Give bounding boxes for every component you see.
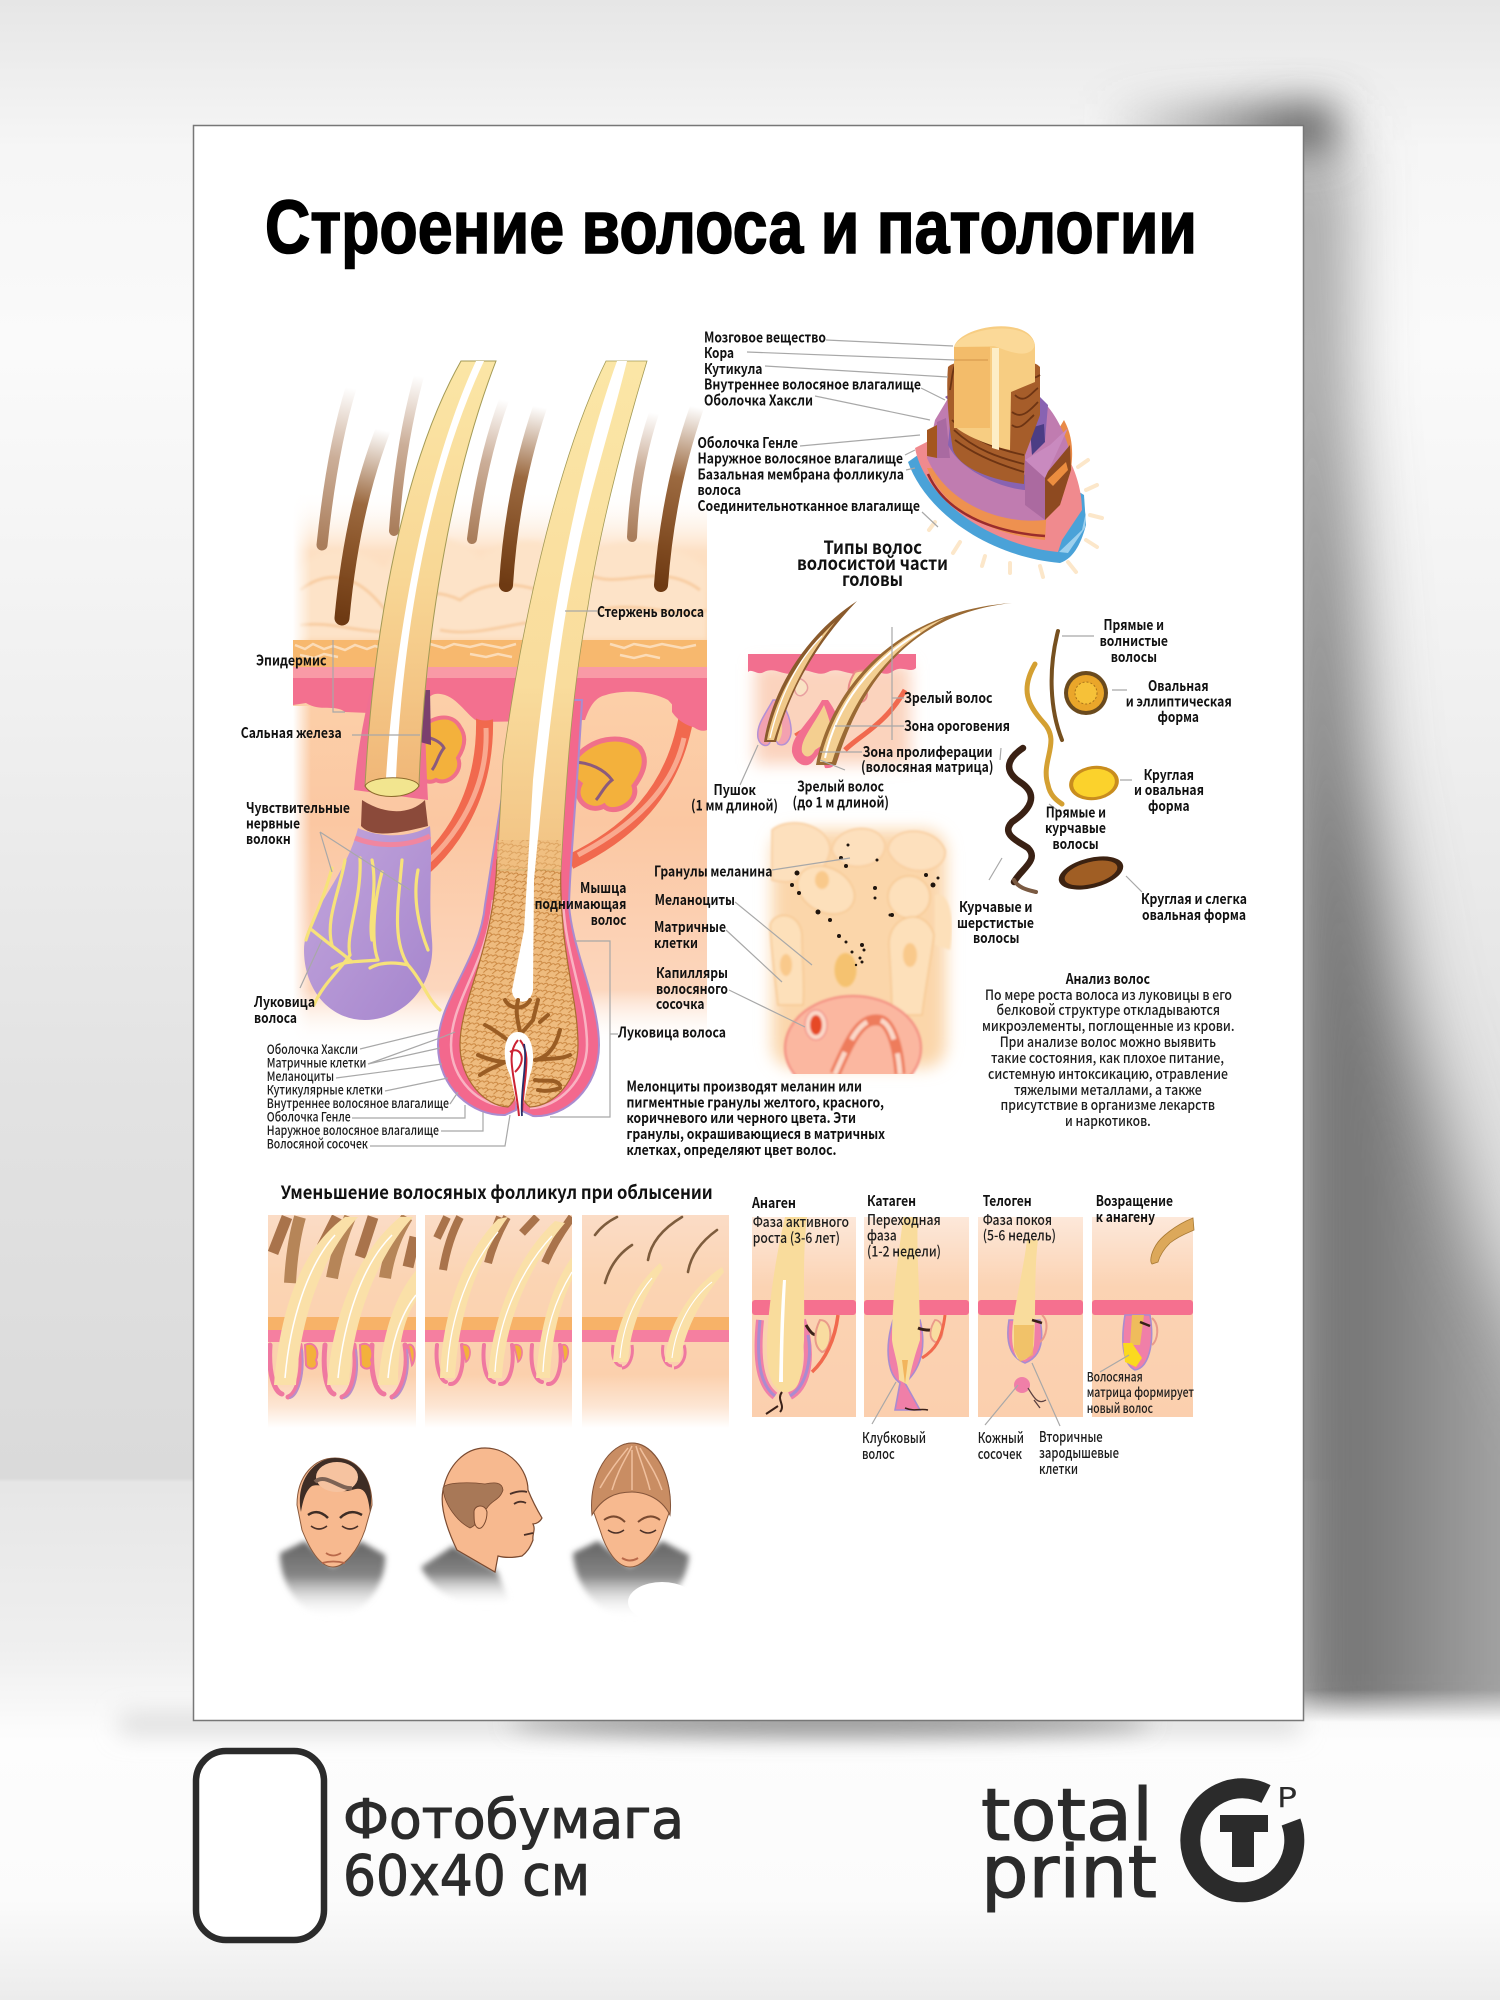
radiating fibres bbox=[929, 460, 1102, 577]
labels for the main illustration bbox=[241, 601, 726, 1153]
labels for the cross-section: Кора bbox=[704, 342, 734, 363]
labels for growth cycle stages: клетки bbox=[1039, 1458, 1078, 1479]
labels for hair shapes: волосы bbox=[1052, 833, 1099, 854]
labels for hair shapes: шерстистые bbox=[957, 912, 1034, 933]
labels for growth cycle stages: Анаген bbox=[751, 1192, 796, 1213]
labels for growth cycle stages: (5-6 недель) bbox=[983, 1225, 1056, 1246]
text block: melanocytes: пигментные гранулы желтого, красного, bbox=[626, 1092, 884, 1113]
paper format label bbox=[343, 1788, 684, 1909]
poster sheet bbox=[194, 126, 1304, 1720]
melanocytes bbox=[478, 1000, 570, 1091]
labels for hair shapes: и овальная bbox=[1134, 779, 1204, 800]
skin block bbox=[293, 513, 707, 1026]
wavy golden hair bbox=[1027, 664, 1062, 804]
leader lines for growth cycle bbox=[872, 1355, 1129, 1426]
labels for hair shapes: Овальная bbox=[1148, 675, 1209, 696]
leader lines for the scalp diagram bbox=[740, 627, 904, 785]
labels for the main illustration: Чувствительные bbox=[246, 797, 350, 818]
labels for the main illustration: Внутреннее волосяное влагалище bbox=[267, 1093, 449, 1112]
labels for hair shapes: Круглая bbox=[1144, 764, 1194, 785]
labels for the cross-section: Кутикула bbox=[704, 358, 762, 379]
text block: melanocytes bbox=[626, 1076, 885, 1160]
labels for the main illustration: Эпидермис bbox=[256, 650, 327, 670]
labels for the cross-section: Базальная мембрана фолликула bbox=[698, 464, 904, 484]
labels for the main illustration: Кутикулярные клетки bbox=[267, 1080, 383, 1099]
scalp diagram: vellus and mature hair bbox=[748, 601, 1012, 768]
skin bands bbox=[293, 640, 707, 667]
labels for the main illustration: Стержень волоса bbox=[597, 601, 704, 622]
labels for melanin close-up: волосяного bbox=[656, 978, 728, 999]
labels for growth cycle stages: Фаза активного bbox=[753, 1211, 849, 1232]
purple bulb with nerves bbox=[304, 800, 440, 1020]
labels for growth cycle stages: матрица формирует bbox=[1087, 1382, 1194, 1401]
growth cycle stage: catagen bbox=[864, 1217, 969, 1417]
labels for the scalp diagram: (1 мм длиной) bbox=[691, 794, 778, 816]
oval section 2 bbox=[1067, 763, 1121, 803]
labels for the scalp diagram: Пушок bbox=[714, 779, 756, 800]
icon: paper format frame bbox=[196, 1751, 324, 1940]
brand wordmark: total bbox=[981, 1773, 1153, 1857]
labels for the main illustration: поднимающая bbox=[535, 893, 626, 914]
portrait: balding man in profile bbox=[421, 1448, 542, 1606]
sebaceous gland right bbox=[571, 739, 644, 810]
text block: hair analysis: системную интоксикацию, отравление bbox=[988, 1064, 1228, 1084]
labels for hair shapes: курчавые bbox=[1045, 817, 1106, 838]
hair shape examples with cross-section ovals bbox=[1008, 631, 1127, 896]
labels for growth cycle stages: Вторичные bbox=[1039, 1426, 1103, 1447]
leader lines for the main illustration bbox=[300, 611, 618, 1146]
portrait: man with crown thinning bbox=[280, 1458, 385, 1618]
portrait: woman with thinning parting bbox=[573, 1443, 696, 1622]
labels for hair shapes: Прямые и bbox=[1046, 802, 1106, 822]
labels for growth cycle stages: зародышевые bbox=[1039, 1442, 1119, 1463]
labels for the main illustration: Наружное волосяное влагалище bbox=[267, 1120, 439, 1139]
labels for hair shapes: волосы bbox=[1111, 646, 1157, 667]
panel: dense follicles bbox=[268, 1215, 425, 1428]
labels for the cross-section bbox=[698, 326, 921, 516]
text block: hair analysis: По мере роста волоса из луковицы в его bbox=[985, 985, 1232, 1005]
text block: melanocytes: Мелонциты производят меланин или bbox=[626, 1076, 862, 1097]
labels for the main illustration: Сальная железа bbox=[241, 722, 342, 743]
melanin close-up illustration bbox=[770, 823, 952, 1100]
paper format label: 60x40 см bbox=[343, 1844, 590, 1909]
heading: hair types: головы bbox=[842, 566, 903, 592]
paper format label: Фотобумага bbox=[343, 1788, 684, 1851]
labels for hair shapes: волнистые bbox=[1100, 630, 1168, 651]
labels for hair shapes: форма bbox=[1158, 706, 1199, 727]
sebaceous gland left bbox=[413, 717, 464, 782]
text block: melanocytes: коричневого или черного цвета. Эти bbox=[626, 1107, 856, 1128]
labels for the main illustration: Луковица bbox=[253, 991, 315, 1012]
labels for the scalp diagram: Зрелый волос bbox=[797, 775, 884, 796]
thin hairs bbox=[322, 376, 697, 618]
labels for the scalp diagram: Зона пролиферации bbox=[862, 741, 992, 762]
text block: hair analysis: белковой структуре откладываются bbox=[996, 1000, 1220, 1020]
text block: hair analysis: При анализе волос можно выявить bbox=[1000, 1032, 1216, 1052]
labels for hair shapes: Курчавые и bbox=[959, 896, 1032, 917]
labels for growth cycle stages bbox=[751, 1190, 1194, 1479]
labels for melanin close-up: сосочка bbox=[656, 993, 704, 1014]
labels for growth cycle stages: (1-2 недели) bbox=[867, 1241, 941, 1262]
labels for hair shapes: Круглая и слегка bbox=[1141, 888, 1247, 909]
hair cross-section illustration bbox=[908, 326, 1102, 577]
labels for the main illustration: Матричные клетки bbox=[267, 1053, 366, 1072]
labels for hair shapes: и эллиптическая bbox=[1126, 690, 1232, 712]
leader lines for hair shapes bbox=[989, 636, 1142, 892]
growth cycle stage: anagen bbox=[752, 1217, 856, 1417]
labels for the main illustration: волокн bbox=[246, 828, 291, 849]
labels for the cross-section: Соединительнотканное влагалище bbox=[698, 495, 920, 516]
brand logo mark: P bbox=[1277, 1781, 1297, 1814]
text block: melanocytes: гранулы, окрашивающиеся в матричных bbox=[626, 1123, 885, 1144]
labels for the main illustration: нервные bbox=[246, 812, 300, 834]
labels for the cross-section: волоса bbox=[698, 479, 741, 500]
labels for the main illustration: Меланоциты bbox=[267, 1066, 334, 1085]
panel: thinning follicles bbox=[425, 1215, 580, 1428]
text block: hair analysis: присутствие в организме лекарств bbox=[1000, 1095, 1215, 1115]
labels for melanin close-up: Меланоциты bbox=[655, 889, 735, 910]
labels for growth cycle stages: Переходная bbox=[867, 1209, 941, 1230]
labels for the scalp diagram: Зрелый волос bbox=[904, 687, 993, 708]
labels for hair shapes: Прямые и bbox=[1104, 614, 1164, 635]
text block: hair analysis: такие состояния, как плохое питание, bbox=[991, 1048, 1224, 1068]
labels for melanin close-up: Капилляры bbox=[656, 962, 728, 983]
labels for the main illustration: Оболочка Хаксли bbox=[267, 1039, 358, 1058]
labels for the main illustration: волоса bbox=[254, 1007, 297, 1028]
text block: hair analysis bbox=[982, 968, 1234, 1131]
oval section 3 bbox=[1055, 850, 1127, 896]
labels for growth cycle stages: волос bbox=[862, 1443, 895, 1464]
labels for the main illustration: Луковица волоса bbox=[617, 1022, 726, 1043]
labels for the main illustration: Оболочка Генле bbox=[267, 1107, 351, 1126]
labels for growth cycle stages: новый волос bbox=[1087, 1398, 1153, 1417]
text block: hair analysis: Анализ волос bbox=[1065, 968, 1150, 989]
labels for the cross-section: Оболочка Хаксли bbox=[704, 390, 813, 411]
text block: hair analysis: и наркотиков. bbox=[1065, 1111, 1151, 1131]
heading: hair types bbox=[797, 534, 948, 592]
heading: hair types: волосистой части bbox=[797, 550, 948, 576]
long hair shaft and follicle bbox=[438, 361, 647, 1118]
labels for the scalp diagram: (волосяная матрица) bbox=[861, 756, 994, 777]
labels for the scalp diagram bbox=[691, 687, 1010, 816]
brand wordmark bbox=[981, 1773, 1157, 1914]
panel: miniaturised follicles bbox=[582, 1215, 729, 1428]
labels for melanin close-up: Матричные bbox=[654, 916, 726, 937]
text block: hair analysis: микроэлементы, поглощенные из крови. bbox=[982, 1016, 1234, 1036]
labels for growth cycle stages: Катаген bbox=[867, 1190, 916, 1211]
labels for growth cycle stages: Волосяная bbox=[1087, 1367, 1143, 1386]
straight hair bbox=[1052, 631, 1062, 740]
labels for the scalp diagram: Зона ороговения bbox=[904, 715, 1010, 736]
labels for the cross-section: Оболочка Генле bbox=[698, 432, 798, 453]
labels for the main illustration: Волосяной сосочек bbox=[267, 1134, 368, 1153]
labels for growth cycle stages: Фаза покоя bbox=[983, 1209, 1052, 1230]
labels for growth cycle stages: к анагену bbox=[1096, 1206, 1156, 1227]
text block: hair analysis: тяжелыми металлами, а также bbox=[1014, 1080, 1202, 1100]
labels for the main illustration: волос bbox=[591, 909, 627, 930]
labels for the main illustration: Мышца bbox=[580, 877, 626, 898]
heading: hair types: Типы волос bbox=[824, 534, 922, 560]
labels for growth cycle stages: Возращение bbox=[1096, 1190, 1173, 1211]
labels for the scalp diagram: (до 1 м длиной) bbox=[792, 792, 889, 812]
oval section 1 bbox=[1064, 671, 1108, 715]
labels for hair shapes: овальная форма bbox=[1142, 904, 1246, 925]
growth cycle stage: telogen bbox=[978, 1217, 1083, 1417]
labels for melanin close-up bbox=[654, 861, 772, 1014]
brand logo mark bbox=[1190, 1781, 1297, 1892]
labels for the cross-section: Наружное волосяное влагалище bbox=[698, 448, 903, 468]
labels for growth cycle stages: сосочек bbox=[978, 1443, 1022, 1464]
curly dark hair bbox=[1008, 748, 1032, 882]
labels for melanin close-up: Гранулы меланина bbox=[654, 861, 772, 882]
labels for melanin close-up: клетки bbox=[654, 932, 698, 953]
labels for the cross-section: Мозговое вещество bbox=[704, 326, 826, 348]
dermal papilla bbox=[505, 1032, 533, 1118]
labels for growth cycle stages: фаза bbox=[867, 1225, 897, 1246]
brand wordmark: print bbox=[981, 1830, 1157, 1914]
labels for growth cycle stages: Кожный bbox=[978, 1427, 1024, 1448]
labels for growth cycle stages: Телоген bbox=[983, 1190, 1032, 1211]
main illustration: hair follicle in skin bbox=[293, 361, 707, 1118]
title: Строение волоса и патологии bbox=[265, 185, 1197, 269]
growth cycle stage: return to anagen bbox=[1092, 1217, 1194, 1417]
labels for growth cycle stages: Клубковый bbox=[862, 1427, 926, 1448]
labels for growth cycle stages: роста (3-6 лет) bbox=[753, 1227, 840, 1248]
labels for hair shapes bbox=[957, 614, 1247, 948]
heading: follicle reduction in baldness: Уменьшение волосяных фолликул при облысении bbox=[281, 1179, 713, 1205]
leader lines for the cross-section bbox=[747, 340, 955, 527]
labels for the cross-section: Внутреннее волосяное влагалище bbox=[704, 374, 921, 395]
labels for hair shapes: форма bbox=[1148, 795, 1190, 816]
text block: melanocytes: клетках, определяют цвет волос. bbox=[626, 1139, 836, 1160]
leader lines for melanin close-up bbox=[726, 858, 850, 1027]
arrector muscles bbox=[405, 680, 707, 882]
cut hair shaft bbox=[354, 361, 496, 800]
labels for hair shapes: волосы bbox=[973, 927, 1019, 948]
